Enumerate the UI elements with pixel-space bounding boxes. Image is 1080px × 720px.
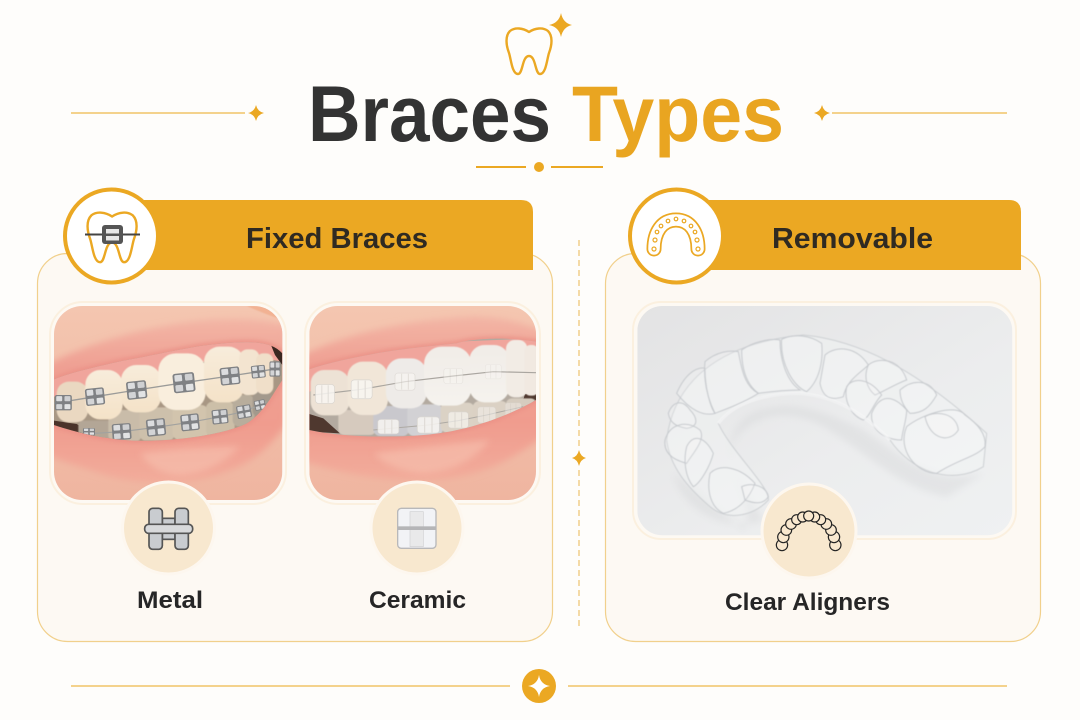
title: Braces [308, 69, 551, 158]
metal badge [122, 482, 214, 574]
bottom ornament [71, 669, 1007, 703]
heading: Fixed Braces [246, 223, 428, 255]
header bar [140, 200, 533, 270]
title: Types [572, 69, 784, 158]
icon: metal bracket [145, 508, 193, 549]
panel background [606, 254, 1040, 642]
heading: Removable [772, 223, 933, 255]
aligner badge [762, 484, 856, 578]
icon: ceramic bracket [398, 508, 436, 548]
photo frame [633, 302, 1016, 539]
ceramic badge [371, 482, 463, 574]
icon: tooth with bracket [65, 190, 158, 282]
panel: removable [606, 190, 1040, 642]
photo: ceramic braces [303, 306, 543, 500]
icon: dental arch [630, 190, 723, 282]
photo: metal braces [47, 306, 287, 500]
label: ceramic: Ceramic [369, 587, 466, 614]
photo: clear aligners [637, 306, 1012, 535]
center dashed divider with star [572, 240, 586, 626]
label: metal: Metal [137, 587, 203, 614]
header bar [700, 200, 1021, 270]
label: clear aligners: Clear Aligners [725, 589, 890, 616]
title [308, 69, 784, 158]
icon: aligner arch [776, 511, 841, 551]
photo frames [50, 302, 540, 504]
top tooth icon with sparkle [506, 13, 572, 74]
panel: fixed braces [38, 190, 552, 642]
title side ornaments [71, 105, 1007, 121]
title underline ornament [476, 162, 603, 172]
panel background [38, 254, 552, 642]
